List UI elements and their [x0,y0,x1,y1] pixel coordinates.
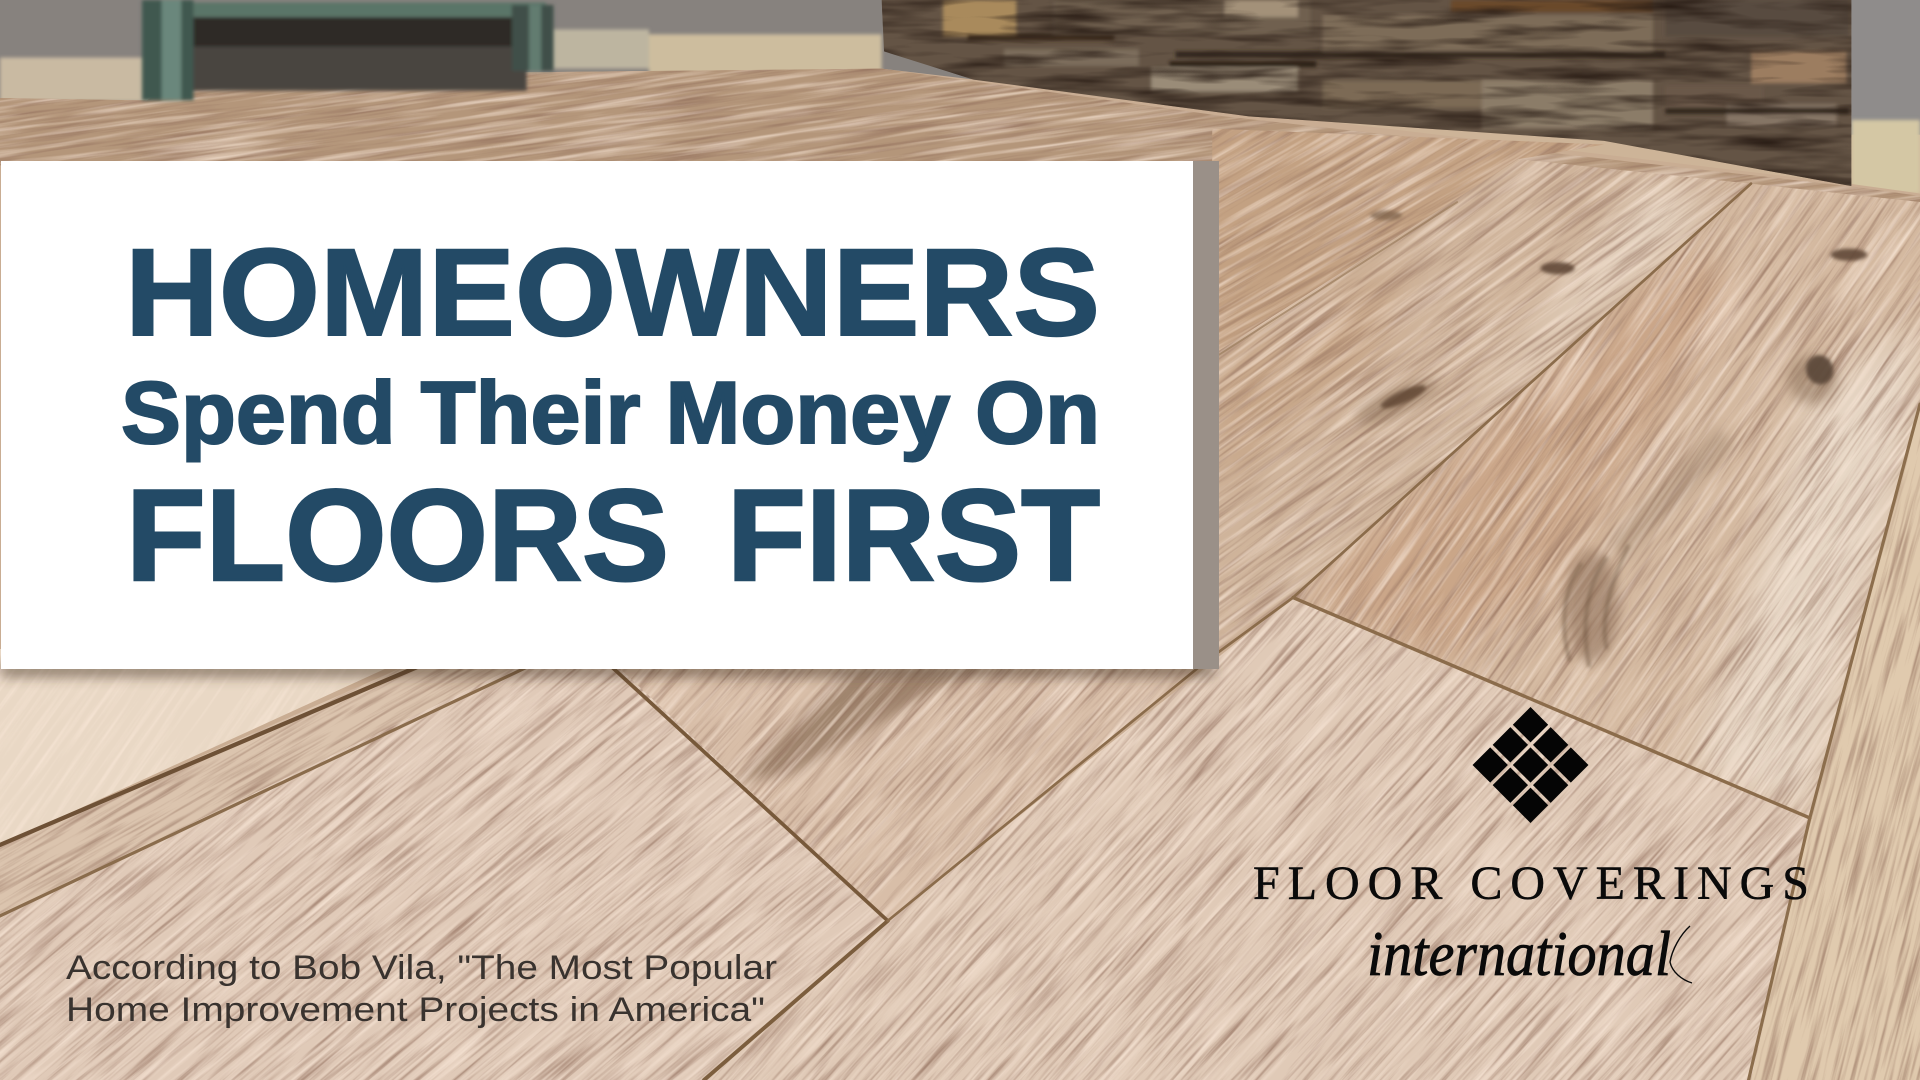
right wall [1849,0,1920,135]
floor plank: left strip [0,661,527,916]
heading: FLOORS FIRST: FIRST [727,462,1100,608]
stone wall [876,0,1855,190]
baseboards [0,29,1920,193]
logo script flourish [1670,926,1692,983]
heading: Spend Their Money On: Spend Their Money On [121,363,1100,462]
floor plank: far right [1751,404,1920,1080]
floor plank: main right with big knot [1293,184,1920,818]
heading: FLOORS FIRST [126,462,1100,608]
panel shadow [0,662,1215,677]
source note: According to Bob Vila, "The Most Popular [66,949,777,987]
icon: diamond tile mark [1473,707,1588,823]
floor plank: left corner light [0,649,429,845]
wood knots [1351,211,1867,667]
logo wordmark: FLOOR COVERINGS [1253,857,1809,910]
floor plank: upper right of panel [1212,129,1604,355]
source note [66,949,777,1029]
floor plank: bottom centre under logo [704,598,1810,1080]
logo script word: international [1367,918,1671,989]
floor plank: large bottom left [0,661,888,1080]
heading: HOMEOWNERS: HOMEOWNERS [125,224,1100,362]
floor plank: knot plank [1212,159,1751,655]
floor plank: centre below panel [612,661,1206,921]
back floor planks [0,69,1920,355]
panel side strip [1193,161,1219,669]
wall [0,0,1920,110]
panel white background [1,161,1193,669]
source note: Home Improvement Projects in America" [66,991,765,1029]
wall bench [142,0,553,100]
heading: FLOORS FIRST: FLOORS [126,462,669,608]
panel: title card [1,161,1219,669]
logo: Floor Coverings International [1253,707,1809,989]
